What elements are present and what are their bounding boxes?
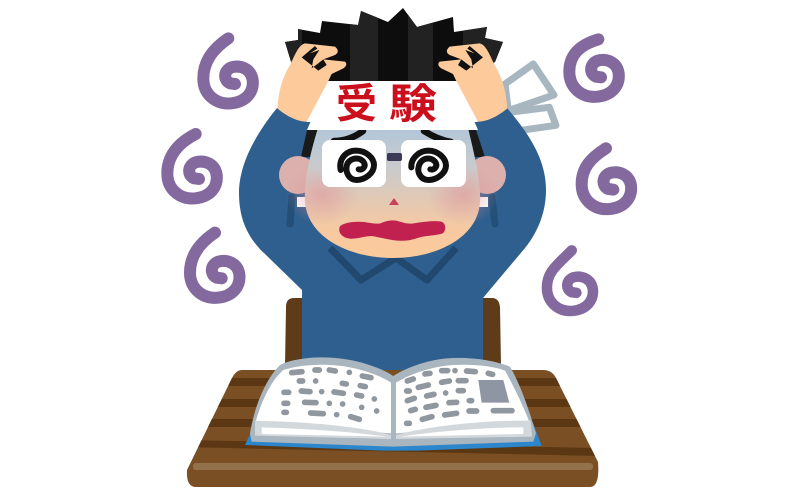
ears [279,156,506,194]
illustration: overwhelmed student studying for an exam [161,8,638,487]
right hand [438,43,507,122]
swirl: middle left [167,134,217,198]
headband text: 験 [389,81,437,127]
nose [389,198,399,205]
left finger gaps [302,46,327,71]
glasses lenses [322,140,466,187]
face [286,128,499,258]
sweater: arms and torso [239,108,546,380]
eyebrows [334,131,451,142]
wavy mouth [341,222,443,239]
headband tails [505,64,556,131]
right finger gaps [458,46,483,71]
left hand [277,43,346,122]
book page block [255,421,391,439]
book left page [256,365,391,433]
book pages outer edge [250,357,536,447]
headband text [336,81,437,127]
desk front highlight [193,463,593,470]
swirl: upper left [203,38,253,104]
collar [330,248,456,280]
headband [307,81,478,130]
desk [180,370,600,487]
swirl: upper right [569,39,619,97]
swirl: middle right [582,148,631,209]
hair [285,8,503,81]
spiral eyes [340,151,446,180]
book cover [245,423,542,451]
hair shading bands [285,11,503,81]
chair back [285,298,501,366]
book text lines [284,370,512,423]
side hair [301,130,485,157]
glasses bridge [387,153,402,161]
cheeks [286,165,358,225]
glasses temples [290,197,495,224]
book right page [396,365,529,433]
swirl: lower right [547,250,593,311]
desk wood grain stripes [180,378,600,456]
open book [245,357,542,451]
swirl: lower left [190,233,239,298]
book picture [478,380,509,403]
headband text: 受 [336,81,377,127]
